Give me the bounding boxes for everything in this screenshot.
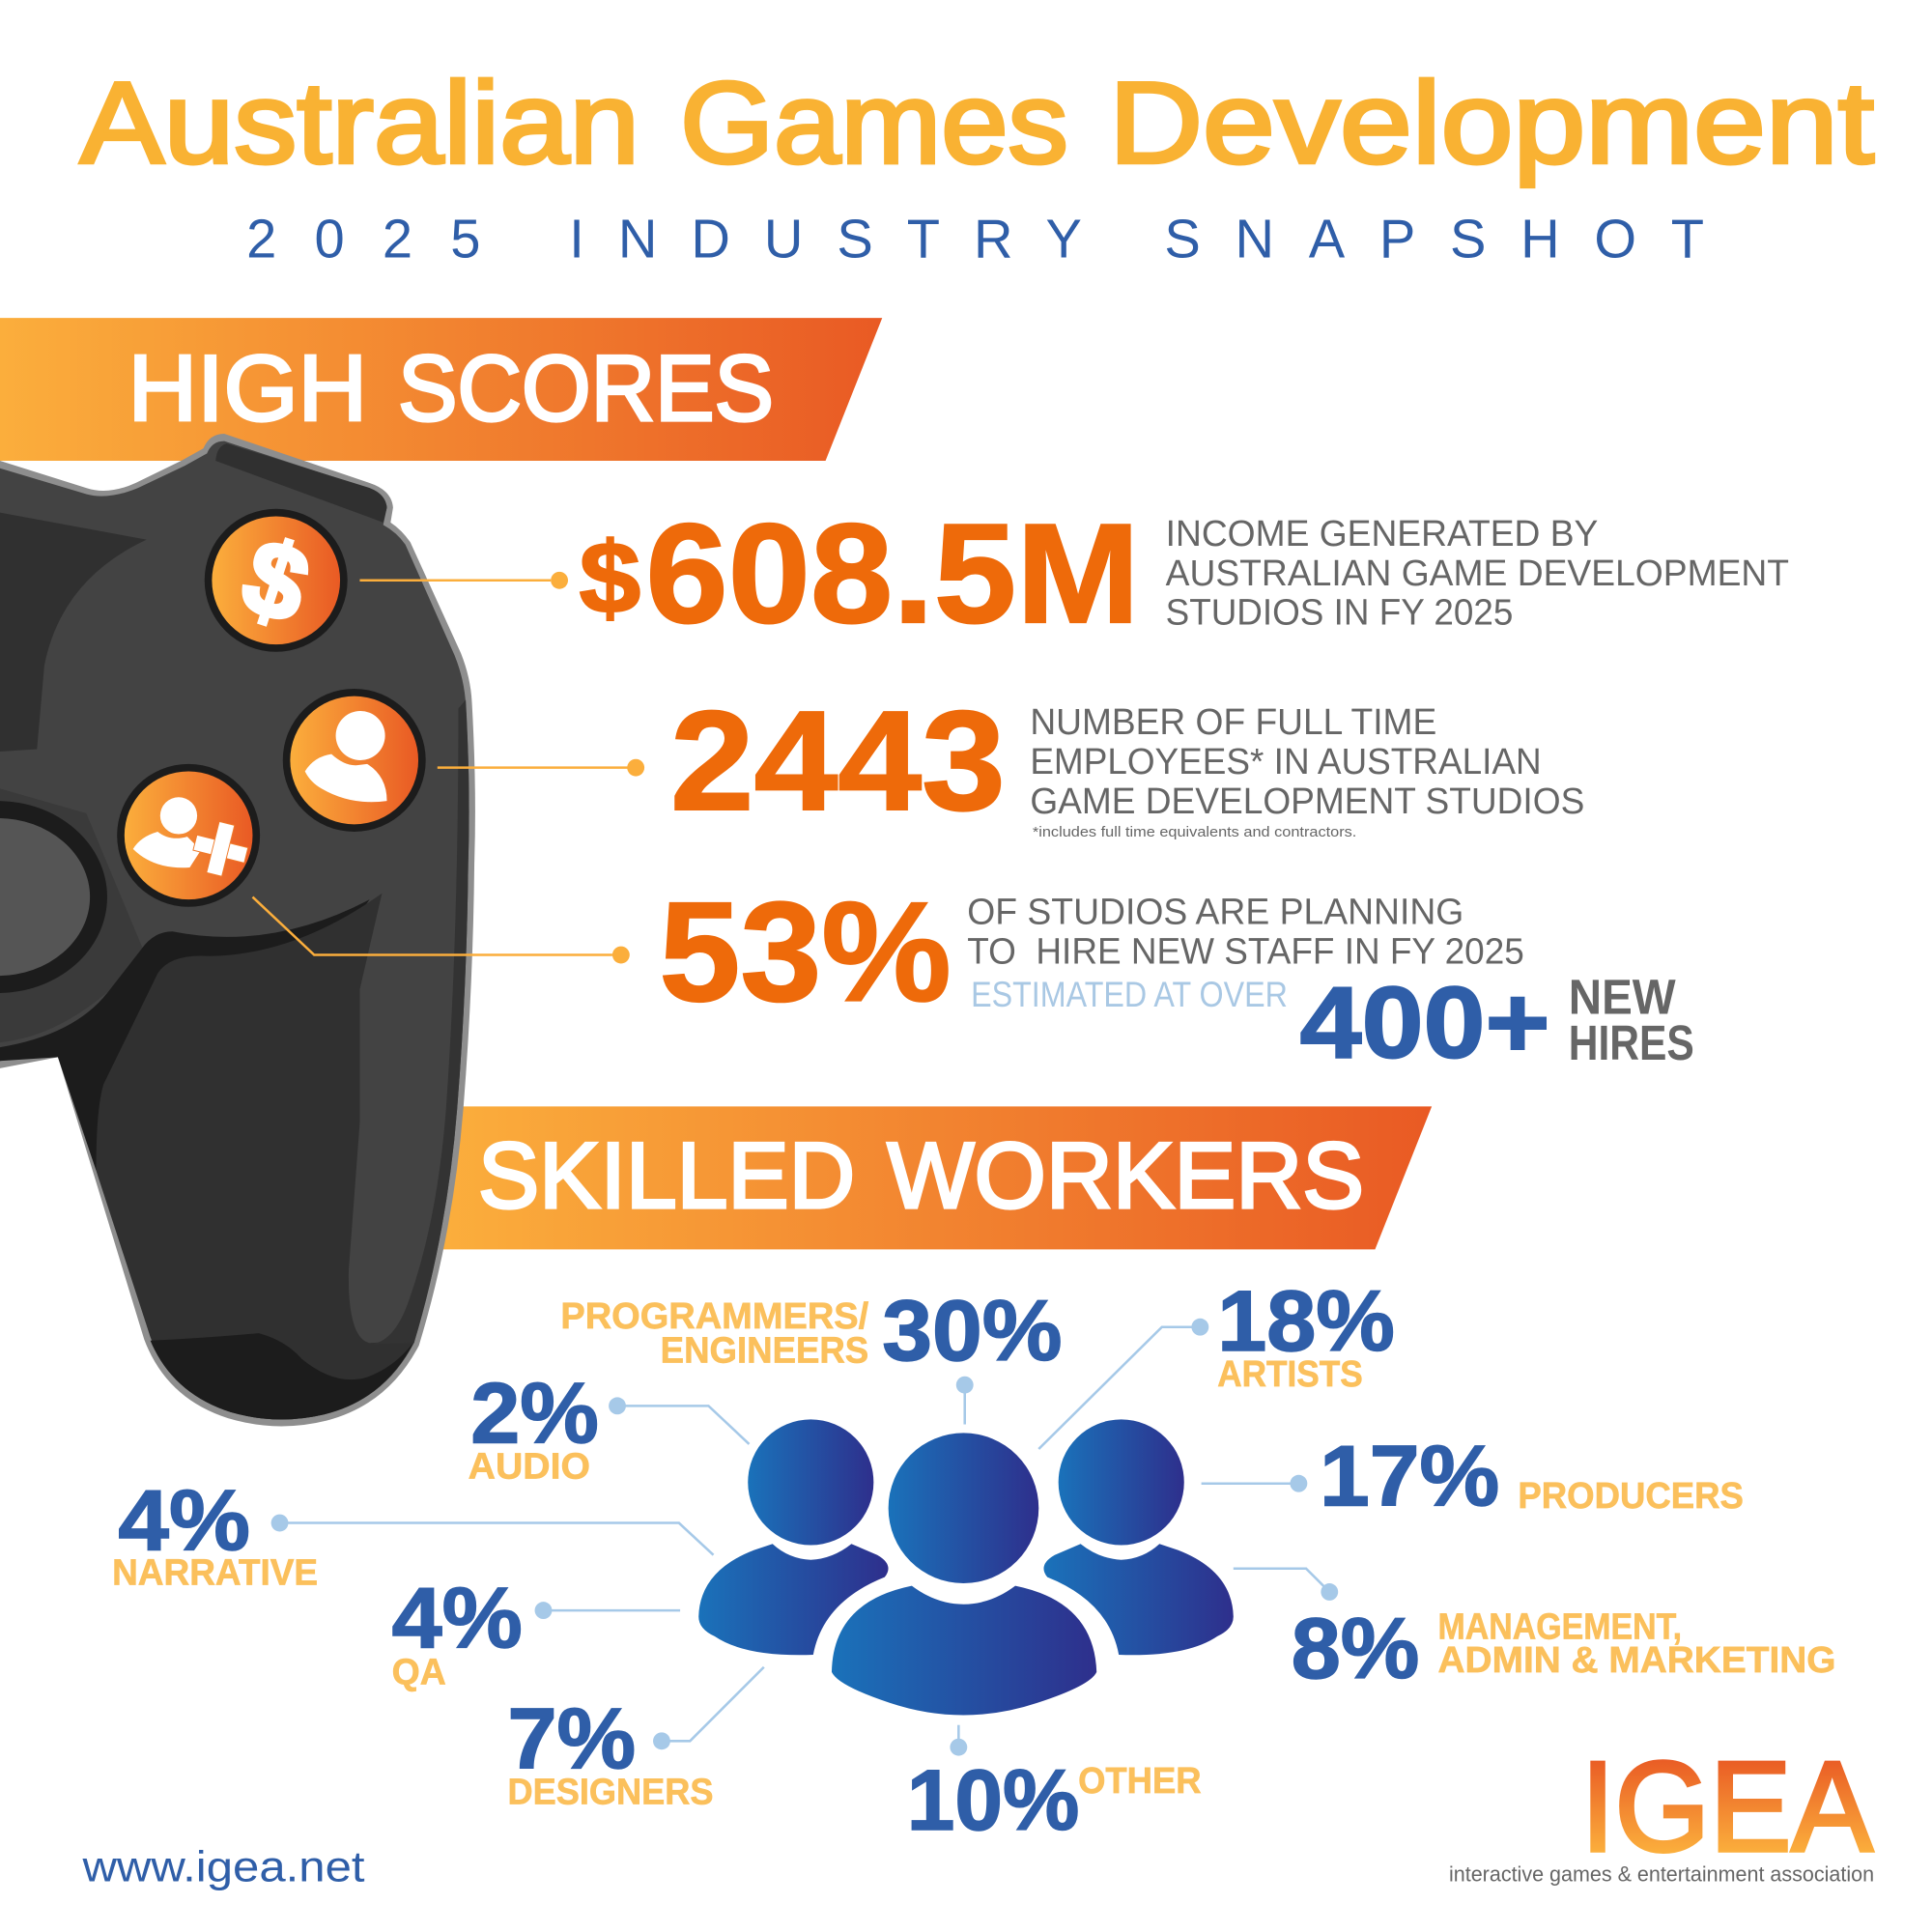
website: www.igea.net [81, 1844, 365, 1891]
stat: employees: GAME DEVELOPMENT STUDIOS [1030, 781, 1584, 822]
callout: programmers: ENGINEERS [661, 1330, 868, 1372]
callout: audio: 2% [470, 1365, 599, 1462]
upper left shell panel [0, 513, 147, 752]
callout: audio: AUDIO [469, 1446, 590, 1488]
button: new hire [117, 764, 260, 907]
banner: high scores [0, 318, 882, 461]
callout: producers [1202, 1428, 1744, 1524]
stat: hiring: TO HIRE NEW STAFF IN FY 2025 [967, 930, 1524, 972]
subtitle: SNAPSHOT [1164, 209, 1704, 270]
stat: income [579, 495, 1789, 653]
banner: skilled workers: SKILLED [478, 1122, 855, 1228]
callout: other: OTHER [1078, 1760, 1202, 1802]
callout: designers: 7% [508, 1690, 636, 1786]
callout: management [1234, 1569, 1836, 1696]
callout: narrative [112, 1472, 714, 1593]
stat: hiring: ESTIMATED AT OVER [971, 975, 1288, 1014]
button: employee [283, 689, 426, 832]
stat: hiring: 400+ [1300, 966, 1550, 1079]
callout: qa [392, 1569, 680, 1693]
callout: designers [508, 1667, 764, 1812]
title: Australian [80, 58, 639, 187]
stat: hiring: HIRES [1569, 1015, 1694, 1070]
stat: income: INCOME GENERATED BY [1166, 513, 1598, 554]
subtitle: 2025 [246, 209, 480, 270]
thumbstick well [0, 788, 146, 1042]
callout: programmers [560, 1282, 1062, 1424]
logo: IGEA: IGEA [1580, 1736, 1873, 1879]
connector: employees [438, 759, 644, 777]
button: dollar: $ [229, 517, 322, 646]
title: Games [680, 58, 1068, 187]
callout: narrative: 4% [118, 1472, 250, 1569]
callout: audio [469, 1365, 750, 1488]
subtitle [246, 209, 1704, 270]
subtitle: INDUSTRY [569, 209, 1082, 270]
callout: narrative: NARRATIVE [112, 1551, 318, 1593]
logo: IGEA: interactive games & entertainment association [1449, 1862, 1874, 1887]
stat: income: AUSTRALIAN GAME DEVELOPMENT [1166, 553, 1789, 594]
stat: employees [670, 682, 1584, 840]
stat: income: $ [579, 522, 640, 635]
banner: high scores: SCORES [398, 335, 774, 440]
callout: producers: PRODUCERS [1518, 1475, 1744, 1517]
callout: designers: DESIGNERS [508, 1771, 714, 1812]
stat: hiring: NEW [1569, 970, 1676, 1025]
stat: income: 608.5M [645, 495, 1140, 653]
banner: skilled workers: WORKERS [887, 1122, 1364, 1228]
logo: IGEA [1449, 1736, 1874, 1887]
stat: employees: *includes full time equivalents and contractors. [1033, 825, 1356, 840]
banner: skilled workers [419, 1106, 1432, 1249]
bottom cap [151, 1333, 414, 1419]
stat: income: STUDIOS IN FY 2025 [1166, 592, 1513, 634]
callout: artists: ARTISTS [1217, 1353, 1363, 1395]
people icon [698, 1419, 1234, 1716]
callout: management: ADMIN & MARKETING [1438, 1639, 1836, 1681]
callout: other: 10% [907, 1751, 1079, 1848]
connector: income [359, 572, 568, 589]
right edge [370, 699, 469, 1345]
callout: artists [1038, 1272, 1395, 1449]
stat: hiring: 53% [659, 873, 952, 1032]
callout: other [907, 1725, 1202, 1848]
lower dark band [0, 899, 370, 1171]
callout: programmers: 30% [882, 1282, 1062, 1378]
title [80, 58, 1874, 187]
game controller [0, 434, 475, 1426]
thumbstick [0, 801, 107, 993]
top bumper [215, 443, 387, 523]
stat: employees: EMPLOYEES* IN AUSTRALIAN [1030, 741, 1542, 782]
callout: qa: 4% [392, 1569, 523, 1665]
thumbstick cap [0, 818, 90, 976]
button: dollar [205, 509, 348, 652]
callout: producers: 17% [1320, 1428, 1499, 1524]
stat: employees: 2443 [670, 682, 1006, 840]
callout: management: MANAGEMENT, [1438, 1605, 1682, 1647]
stat: hiring: OF STUDIOS ARE PLANNING [967, 892, 1463, 933]
callout: qa: QA [392, 1652, 446, 1693]
banner: high scores: HIGH [128, 335, 367, 440]
callout: programmers: PROGRAMMERS/ [560, 1295, 869, 1337]
stat: employees: NUMBER OF FULL TIME [1030, 701, 1436, 743]
title: Development [1109, 58, 1874, 187]
callout: management: 8% [1292, 1600, 1419, 1696]
connector: hiring [252, 897, 630, 963]
callout: artists: 18% [1217, 1272, 1395, 1369]
grip [96, 894, 414, 1419]
stat: hiring [659, 873, 1694, 1079]
